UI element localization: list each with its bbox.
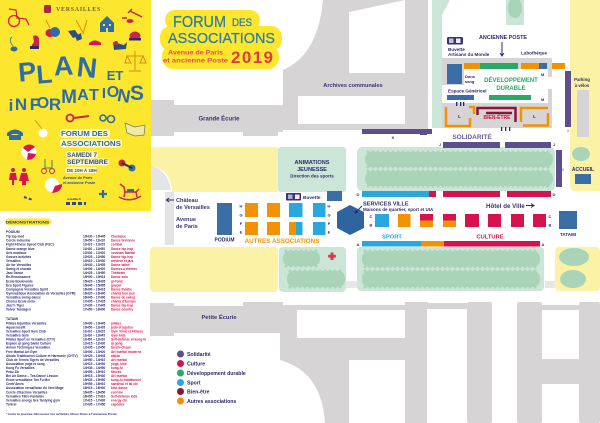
list: podium times: 16H00 – 16H15 — [83, 288, 106, 292]
stand row: top — [464, 63, 565, 69]
labels: solidarité letters: I — [562, 168, 564, 172]
icon: buvette top — [447, 37, 463, 44]
label: château de versailles: Avenue — [176, 217, 196, 223]
heading: informations: O — [107, 84, 119, 101]
list: tatami disciplines: Art martial — [111, 358, 127, 362]
stands: right squares: B — [549, 222, 552, 228]
heading: informations: O — [37, 95, 49, 112]
list: podium activities: Gosses activités — [6, 255, 31, 259]
list: podium activities: Éco Sport Figures — [6, 282, 34, 288]
list: tatami times: 13H25 – 13H45 — [83, 354, 106, 358]
legend: Culture — [187, 362, 205, 368]
list: podium activities: Versailles — [6, 259, 21, 263]
labels: solidarité letters: K — [392, 136, 395, 140]
icon: gavel — [122, 9, 142, 18]
heading: démonstrations — [5, 218, 51, 225]
icons: social links: versailles.fr — [67, 198, 81, 201]
panel: démonstrations — [5, 218, 147, 416]
stands: right squares: C — [549, 214, 552, 219]
label: développement durable: DURABLE — [496, 86, 526, 92]
list: podium activities: Swing et chorale — [6, 267, 32, 271]
list: podium times: 17H50 – 18H00 — [83, 308, 106, 312]
label: sport: SPORT — [382, 234, 402, 240]
list: podium activities: Fight Fitness Speed Club (FSC) — [6, 243, 54, 247]
services ville hexagon: SERVICES VILLE — [363, 202, 409, 208]
poste labels: L — [458, 114, 461, 119]
list: podium times: 14H00 – 14H20 — [83, 267, 106, 271]
list: podium disciplines: Danses à thèmes — [111, 267, 137, 271]
list: podium times: 12H00 – 12H20 — [83, 251, 106, 255]
list: podium activities: Jazz Dance — [6, 271, 23, 275]
list: podium times: 14H25 – 14H50 — [83, 271, 106, 275]
accueil — [572, 167, 594, 184]
icon: scales — [125, 51, 146, 71]
list: podium times: 10H50 – 11H10 — [83, 238, 105, 242]
list: podium disciplines: Danse hip-hop — [111, 247, 133, 251]
list: podium times: 12H25 – 12H50 — [83, 255, 106, 259]
title: forum des associations 2019: Avenue de Paris — [168, 50, 223, 56]
building labels: Archives communales — [323, 83, 383, 89]
title: forum des associations 2019: FORUM — [173, 14, 226, 31]
labels: solidarité letters: J — [439, 143, 441, 147]
list: podium activities: Tip top mod — [6, 234, 24, 238]
stands: left squares: G — [327, 212, 331, 218]
tatami: TATAMI — [560, 232, 576, 237]
animations jeunesse label — [290, 160, 334, 178]
icon: chess knight — [30, 35, 39, 49]
list: podium disciplines: Danse théâtre — [111, 288, 132, 292]
stands: left squares: H — [240, 204, 243, 208]
list: tatami activities: Kung Fu Versailles — [6, 366, 35, 370]
list: podium disciplines: gospel — [111, 284, 121, 288]
stands: left squares: F — [328, 221, 331, 226]
heading: informations — [9, 82, 144, 115]
list: podium activities: Ecole Boulevarde — [6, 279, 33, 283]
services ville hexagon — [337, 202, 434, 235]
list: podium activities: Compagnie Versailles Spirit — [6, 288, 49, 292]
animations jeunesse label: Direction des sports — [290, 174, 334, 178]
list: tatami times: 17H35 – 17H50 — [83, 402, 106, 406]
list: podium times: 17H30 – 17H45 — [83, 304, 106, 308]
logo: Versailles: VERSAILLES — [56, 7, 101, 13]
stand: blue top left — [447, 64, 462, 84]
heading: informations: i — [9, 96, 13, 115]
title: forum des associations 2019 — [160, 10, 282, 69]
icon: dumbbell — [118, 160, 136, 172]
stands: right squares: B — [370, 222, 373, 228]
label: château de versailles: de Versailles — [176, 205, 210, 211]
icon: volleyball — [22, 144, 36, 160]
list: tatami disciplines: kung-fu — [111, 366, 123, 370]
list: podium times: 10H30 – 10H45 — [83, 234, 106, 238]
poste labels — [448, 47, 547, 119]
list: tatami times: 12H15 – 12H30 — [83, 342, 106, 346]
list: podium times: 15H20 – 15H35 — [83, 279, 106, 283]
list: tatami activities: Espace qi gong Santé Culture — [6, 342, 51, 346]
label: château de versailles: Château — [176, 198, 199, 204]
list: podium activities: Volver Tanzagen — [6, 308, 31, 312]
list: podium times: 16H45 – 17H00 — [83, 296, 106, 300]
list: tatami activities: Association yoga et song — [6, 362, 45, 366]
row a stands: A — [542, 242, 545, 247]
labels: solidarité letters — [392, 129, 569, 172]
stands: left squares: E — [240, 230, 243, 234]
icon: sunglasses — [24, 197, 33, 200]
list: podium disciplines: Danse hip-hop — [111, 255, 133, 259]
list: podium disciplines: Danse latine — [111, 263, 130, 267]
row d stands: D — [357, 192, 360, 197]
heading: informations: S — [130, 82, 144, 105]
list: podium disciplines: gi-Tonic — [111, 279, 123, 283]
heading: plan: L — [35, 58, 54, 90]
icon: access markers — [456, 102, 510, 131]
stand row: lower — [447, 95, 531, 100]
list: podium disciplines: Danse hip-hop — [111, 304, 133, 308]
icons: social links — [66, 198, 86, 205]
list: podium disciplines: Danse de swing — [111, 296, 135, 300]
list: tatami activities: Versailles Gym — [6, 334, 29, 338]
list: tatami disciplines: qi gong — [111, 342, 123, 346]
accueil: ACCUEIL — [572, 167, 594, 173]
heading: informations: I — [102, 85, 106, 102]
row d stands — [357, 191, 556, 197]
poste labels: Buvette — [448, 47, 465, 52]
icon: binoculars — [100, 115, 114, 122]
icon: key — [66, 114, 89, 122]
list: tatami activities: Pilates Equilibre Versailles — [6, 322, 47, 326]
legend: Solidarité — [187, 352, 211, 358]
list: tatami times: 11H30 – 11H45 — [83, 334, 105, 338]
poster panel: plan et informations — [0, 0, 151, 211]
list: podium activities: Gymnastique Association de Versailles (GYM) — [6, 292, 76, 296]
stand: left L orange — [446, 107, 474, 126]
list: podium times: 11H15 – 11H25 — [83, 243, 105, 247]
list: tatami activities: Aikido Traditionnel Culture et Harmonie (CHTV) — [6, 354, 78, 358]
parking à vélos — [574, 77, 590, 137]
list: tatami times: 14H35 – 14H50 — [83, 366, 106, 370]
list: tatami disciplines: Self-défense kids — [111, 394, 137, 398]
list: tatami disciplines: energy chi — [111, 398, 127, 402]
legend: Autres associations — [187, 399, 236, 405]
animations jeunesse label: ANIMATIONS — [294, 160, 330, 166]
gardens and lawns — [150, 0, 600, 292]
heading: plan — [17, 51, 123, 90]
list: tatami times: 15H35 – 15H50 — [83, 378, 106, 382]
list: podium times: 15H00 – 15H15 — [83, 275, 106, 279]
label: autres associations: AUTRES ASSOCIATIONS — [245, 238, 319, 245]
list: tatami activities: Association versaillaise du Vent Mage — [6, 386, 64, 390]
podium: PODIUM — [214, 238, 234, 244]
icon: plus — [99, 190, 107, 198]
heading: informations: R — [49, 95, 61, 114]
list: podium disciplines: Théâtrale — [111, 271, 125, 275]
list: tatami disciplines: fitness — [111, 370, 122, 374]
list: tatami times: 10H50 – 11H05 — [83, 326, 105, 330]
list: podium times: 15H40 – 15H55 — [83, 284, 106, 288]
list: tatami disciplines: Gym Tonic et Fitness — [111, 330, 143, 334]
stands: right squares: C — [370, 214, 373, 219]
list: podium activities: Air for Versailles — [6, 263, 31, 267]
icon: hat — [126, 19, 141, 40]
heading: informations: M — [61, 87, 77, 108]
poster event block — [60, 129, 122, 185]
poster event block: DE 10H À 18H — [67, 167, 97, 173]
list: tatami times: 15H55 – 16H10 — [83, 382, 106, 386]
list: tatami activities: Pilates Sport en Versailles (CTV) — [6, 338, 55, 342]
list: tatami disciplines: sanshou et tai chi — [111, 382, 138, 386]
icon: first aid cross — [328, 252, 336, 260]
list: podium disciplines: chants d'Europe — [111, 300, 136, 304]
row a stands — [357, 241, 545, 247]
tatami — [559, 211, 577, 237]
legend: Sport — [187, 380, 201, 386]
list: tatami disciplines: Self-défense et kung-fu — [111, 338, 146, 342]
list: tatami activities: Centr'Ames — [6, 382, 24, 386]
label: hôtel de ville: Hôtel de Ville — [486, 203, 525, 210]
list: podium disciplines: vovinam Martial — [111, 251, 135, 255]
list: tatami disciplines: Art martial moderne — [111, 350, 142, 354]
list: tatami disciplines: Gym kids — [111, 334, 126, 338]
list: podium activities: PODIUM — [6, 230, 20, 234]
building labels: Petite Écurie — [201, 313, 237, 321]
poste labels: M — [541, 72, 545, 77]
list: podium disciplines: combat — [111, 243, 123, 247]
stands: left squares: E — [328, 230, 331, 234]
labels: solidarité letters: I — [567, 129, 569, 133]
label: château de versailles: de Paris — [176, 224, 198, 230]
stand: solidarité bars — [362, 71, 571, 187]
list: tatami activities: Cercle d'Escrime Versailles — [6, 390, 48, 394]
list: tatami activities: Peau Zik — [6, 370, 19, 374]
list: tatami activities: TATAMI — [6, 317, 18, 321]
heading: informations: N — [116, 85, 132, 107]
heading: informations: N — [15, 95, 27, 114]
icon: mussel and butterfly — [46, 20, 87, 41]
list: tatami activities: Versailles Sport Gym Club — [6, 330, 46, 334]
list: tatami activities: Bel Air Danse – Tea Dance Lesson — [6, 374, 58, 378]
heading: plan: N — [75, 51, 99, 84]
podium — [214, 203, 234, 244]
title: forum des associations 2019: ASSOCIATIONS — [168, 30, 275, 47]
list: podium activities: Danse orange blue — [6, 247, 35, 251]
list: tatami disciplines: aïkido — [111, 354, 120, 358]
list: tatami times: 16H15 – 16H30 — [83, 386, 106, 390]
list: podium activities: Chorus Ecole mélo — [6, 300, 35, 304]
animations jeunesse label: JEUNESSE — [297, 167, 327, 173]
list: tatami times: 12H35 – 12H50 — [83, 346, 106, 350]
list: tatami activities: Versailles Tâtre Fantaisie — [6, 394, 44, 398]
title: forum des associations 2019: DES — [232, 17, 252, 29]
list: tatami activities: Free Martial Art Gym — [6, 350, 37, 354]
list: tatami times: 10H30 – 10H45 — [83, 322, 106, 326]
title: forum des associations 2019: et ancienne Poste — [163, 58, 228, 64]
list: tatami activities: Ecole versaillaise Tan Fu Mei — [6, 378, 50, 382]
legend: Bien-être — [187, 390, 210, 396]
logo: Versailles — [44, 5, 101, 13]
heading: plan: P — [17, 56, 37, 88]
legend — [177, 350, 246, 405]
label: château de versailles — [166, 198, 210, 230]
buvette avenue: Buvette — [303, 195, 321, 201]
list: podium disciplines: Danse solo — [111, 275, 128, 279]
icon: wheelchair — [8, 9, 29, 26]
icon: bicycle — [42, 159, 54, 174]
list: tatami times: 11H50 – 12H10 — [83, 338, 105, 342]
list: tatami times: 14H55 – 15H10 — [83, 370, 106, 374]
stands: right squares — [370, 214, 552, 228]
poste labels: Espace Générioel — [448, 88, 487, 94]
poster event block: FORUM DES — [61, 129, 108, 138]
list: tatami times: 17H15 – 17H30 — [83, 398, 106, 402]
list: tatami times: 16H55 – 17H10 — [83, 394, 106, 398]
building labels: Grande Écurie — [198, 114, 240, 122]
list: podium times: 13H40 – 13H55 — [83, 263, 106, 267]
list: tatami disciplines: pilates — [111, 322, 121, 326]
stands: left squares: H — [328, 204, 331, 208]
list: tatami disciplines: taï-chi-chuan — [111, 346, 131, 350]
list: podium activities: Versailles swing dance — [6, 296, 41, 300]
labels: solidarité letters: J — [553, 143, 555, 147]
list: podium disciplines: Danse bretonne — [111, 238, 135, 242]
list: podium times: 13H10 – 13H30 — [83, 259, 106, 263]
poste labels: sang — [465, 79, 475, 84]
list: tatami times: 14H15 – 14H30 — [83, 362, 106, 366]
arrow: to ancienne poste — [500, 42, 504, 56]
list: tatami activities: Club de Tennis Tigres de Versailles — [6, 358, 59, 362]
label: ancienne poste: ANCIENNE POSTE — [479, 35, 527, 41]
list: tatami activities: Tentrel — [6, 402, 17, 406]
icon: bowl — [89, 40, 101, 45]
title: forum des associations 2019: 2019 — [231, 48, 273, 67]
icon: open book — [125, 123, 145, 136]
list: podium activities: Arts martiaux — [6, 251, 27, 255]
stands: left squares — [239, 203, 331, 235]
footnote: * toute la journée découvrez les activités libres Dans à l'ancienne Poste — [6, 412, 117, 416]
list: tatami disciplines: judo et jujutsu — [110, 326, 133, 330]
poster event block: et ancienne Poste — [63, 181, 95, 185]
zone: ancienne poste — [442, 35, 565, 131]
label: développement durable: DÉVELOPPEMENT — [484, 76, 538, 84]
poster event block: SAMEDI 7 — [67, 153, 98, 159]
label: solidarité: SOLIDARITÉ — [452, 132, 492, 141]
poste labels: Labothèque — [521, 50, 547, 56]
poste labels: Dons — [465, 74, 476, 79]
poster event block: SEPTEMBRE — [67, 160, 108, 166]
row d stands: D — [553, 192, 556, 197]
list: podium activities: Jazz'n Tiger — [6, 304, 25, 308]
poste labels: Artisans du Monde — [448, 52, 490, 57]
list: tatami times: 16H35 – 16H50 — [83, 390, 106, 394]
icon: fish — [113, 41, 127, 50]
icon: two people — [9, 168, 29, 185]
stands: left squares: G — [239, 212, 243, 218]
legend: Développement durable — [187, 371, 246, 377]
list: podium activities: Cercle mélusine — [6, 238, 31, 242]
list: tatami times: 13H50 – 14H10 — [83, 358, 106, 362]
heading: informations: A — [77, 87, 89, 104]
label: développement durable — [484, 76, 538, 92]
building labels — [198, 83, 383, 321]
list: tatami activities: Versailles energy Gra Tantying gym — [6, 398, 60, 402]
list: tatami times: 11H10 – 11H25 — [83, 330, 105, 334]
stand: right L orange — [521, 108, 548, 126]
list: podium disciplines: Classique — [111, 234, 126, 238]
list: podium disciplines: chants bon jour — [111, 292, 136, 296]
list: podium times: 17H05 – 17H25 — [83, 300, 106, 304]
list: tatami times: 13H00 – 13H20 — [83, 350, 106, 354]
list: podium disciplines: Danse country — [111, 308, 133, 312]
poste labels: L — [533, 114, 536, 119]
label: culture: CULTURE — [476, 234, 504, 240]
list: tatami disciplines: kiné danse — [111, 386, 128, 390]
icon: computer mouse — [10, 37, 18, 52]
heading: informations: F — [30, 95, 40, 114]
list: podium times: 11H30 – 11H50 — [83, 247, 105, 251]
poster event block: ASSOCIATIONS — [61, 139, 121, 148]
buvette avenue — [286, 191, 342, 201]
icon: pink balloon — [45, 178, 62, 193]
list: tatami disciplines: yoga, kiné — [111, 362, 127, 366]
heading: plan: A — [53, 51, 74, 82]
list: podium disciplines: western et jazz — [110, 259, 134, 263]
icon: rocking horse — [119, 184, 141, 200]
list: podium times: 16H20 – 16H40 — [83, 292, 106, 296]
list: tatami times: 15H15 – 15H30 — [83, 374, 106, 378]
parking à vélos: Parking — [574, 77, 590, 82]
icon: dropper — [35, 120, 48, 138]
list: tatami activities: Aquacrossfit — [6, 326, 26, 330]
heading: informations: T — [89, 87, 99, 104]
list: tatami disciplines: escrime — [111, 390, 123, 394]
icon: telephone — [7, 130, 23, 140]
list: tatami activities: Aviron Techniques Versailles — [6, 346, 50, 350]
poster event block: Avenue de Paris — [63, 176, 92, 180]
heading: démonstrations: DÉMONSTRATIONS — [6, 220, 49, 224]
list: podium activities: Re-Renaissance — [6, 275, 31, 279]
stand: bien-être — [478, 108, 516, 122]
stands: left squares: F — [240, 221, 243, 226]
parking à vélos: à vélos — [575, 83, 590, 88]
heading: plan: ET — [107, 68, 123, 83]
list: tatami disciplines: capoeira — [111, 402, 124, 406]
icon: house — [100, 16, 114, 32]
poste labels: M — [541, 97, 545, 102]
list: tatami disciplines: kung-fu traditionnel — [111, 378, 141, 382]
label: bien-être: BIEN-ÊTRE — [484, 113, 511, 121]
list: tatami disciplines: Art martial — [111, 374, 127, 378]
services ville hexagon: Maisons de quartier, sport et UIA — [363, 207, 434, 212]
row a stands: A — [357, 242, 360, 247]
map: streets and buildings — [150, 0, 600, 423]
